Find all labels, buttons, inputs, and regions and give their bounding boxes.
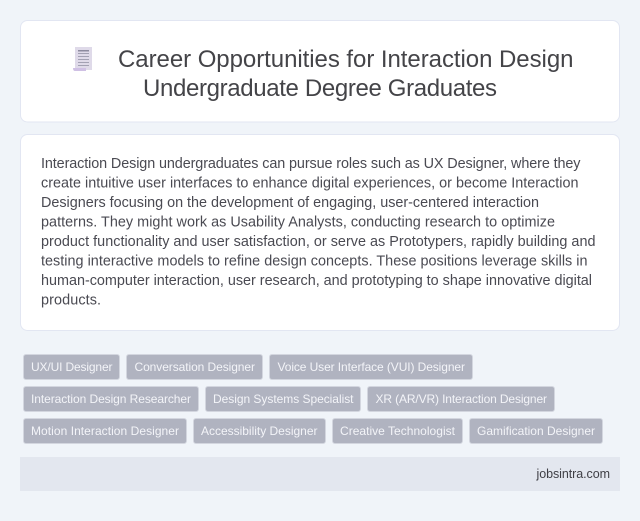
tag: Gamification Designer [470,418,602,444]
title [118,46,574,102]
tag: Voice User Interface (VUI) Designer [270,354,472,380]
tag: Interaction Design Researcher [24,386,198,412]
tag: Voice User Interface (VUI) Designer: Voice User Interface (VUI) Designer [278,360,465,374]
tag: Interaction Design Researcher: Interaction Design Researcher [31,392,191,406]
text block: description: patterns. They might work as Usability Analysts, conducting research to optimize [41,214,555,230]
panel: header [20,20,620,122]
text block: description: human-computer interaction, user research, and prototyping to shape innovative digital [41,273,592,289]
text block: description: testing interactive models to refine design concepts. These positions leverage skills in [41,254,588,270]
tag: XR (AR/VR) Interaction Designer: XR (AR/VR) Interaction Designer [376,392,547,406]
text block: description: create intuitive user interfaces to enhance digital experiences, or become Interaction [41,176,578,192]
tag: Design Systems Specialist [206,386,360,412]
footer [20,457,620,491]
text block: description: products. [41,292,101,308]
title: Career Opportunities for Interaction Design [118,46,574,73]
tag: Conversation Designer [126,354,262,380]
tag: UX/UI Designer [24,354,120,380]
tag: Creative Technologist [332,418,462,444]
tag: UX/UI Designer: UX/UI Designer [31,360,112,374]
text block: description [41,156,596,308]
tag: Creative Technologist: Creative Technologist [340,424,456,438]
panel: description [20,134,620,330]
text block: description: Interaction Design undergraduates can pursue roles such as UX Designer, where they [41,156,581,172]
tag: Conversation Designer: Conversation Designer [134,360,255,374]
text block: description: product functionality and user satisfaction, or serve as Prototypers, rapidly building and [41,234,596,250]
text block: description: Designers focusing on the development of engaging, user-centered interaction [41,195,539,211]
tag: Accessibility Designer: Accessibility Designer [201,424,318,438]
tag list [24,354,602,444]
tag: XR (AR/VR) Interaction Designer [368,386,554,412]
footer text: jobsintra.com [536,467,610,481]
title: Undergraduate Degree Graduates [143,75,497,102]
icon: paper scroll [73,47,92,71]
tag: Motion Interaction Designer: Motion Interaction Designer [31,424,179,438]
tag: Accessibility Designer [194,418,326,444]
tag: Gamification Designer: Gamification Designer [477,424,595,438]
tag: Motion Interaction Designer [24,418,186,444]
tag: Design Systems Specialist: Design Systems Specialist [213,392,354,406]
